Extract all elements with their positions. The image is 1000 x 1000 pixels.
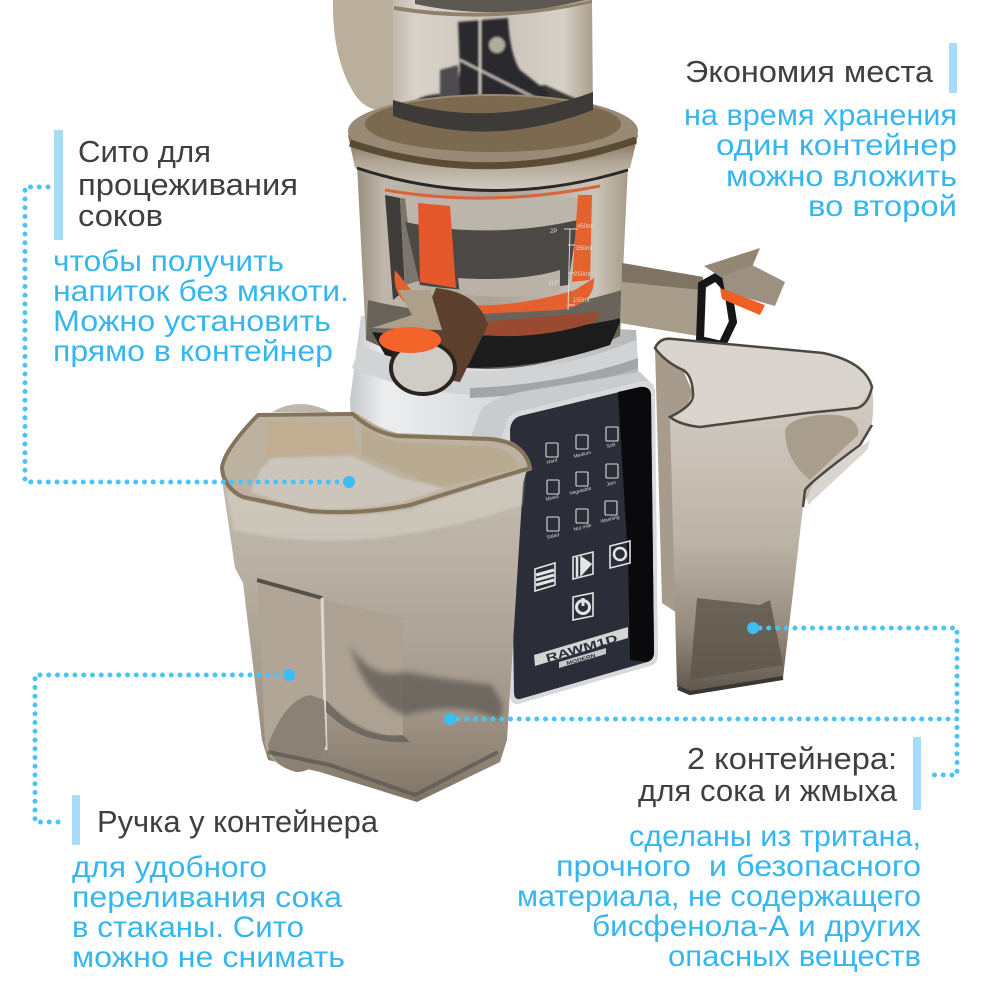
feed chute xyxy=(333,0,396,110)
mode labels xyxy=(545,442,620,541)
heading xyxy=(638,741,898,808)
cap flap xyxy=(372,290,442,330)
auger shaft xyxy=(452,18,548,135)
spout edge line xyxy=(803,425,872,507)
tube mouth xyxy=(391,342,455,394)
left dark wall xyxy=(385,195,405,300)
strainer xyxy=(385,195,580,300)
block: two containers xyxy=(517,737,921,973)
scale labels lower: 1LP xyxy=(548,281,559,287)
spout tube xyxy=(620,263,703,336)
mode icons xyxy=(546,427,618,531)
scale labels: 450ml xyxy=(577,224,593,230)
description: чтобы получить xyxy=(53,245,284,278)
rim fill xyxy=(220,412,532,515)
rim line xyxy=(655,339,872,427)
measuring scale xyxy=(564,224,593,310)
heading: Экономия места xyxy=(685,54,934,89)
heading: соков xyxy=(78,198,163,233)
bottom floor xyxy=(690,598,783,680)
description: для удобного xyxy=(72,851,267,884)
scale labels lower xyxy=(548,229,592,304)
lid band xyxy=(348,135,638,189)
icon salad xyxy=(547,517,559,531)
icon nut milk xyxy=(576,509,588,523)
heading: для сока и жмыха xyxy=(638,773,898,808)
marker xyxy=(343,476,355,488)
description: Можно установить xyxy=(53,305,331,338)
heading: Сито для xyxy=(78,134,211,169)
auger highlight xyxy=(460,60,535,98)
callout: sieve dotted line xyxy=(25,187,355,488)
handle body xyxy=(258,580,326,772)
scale labels lower: 350ml xyxy=(576,246,592,252)
inner back wall xyxy=(265,422,358,458)
callout: handle dotted line xyxy=(35,669,295,822)
marker xyxy=(283,669,295,681)
panel frame xyxy=(505,381,658,704)
orange arc under lid xyxy=(385,186,600,198)
panel black reflection xyxy=(618,387,654,662)
modern strip xyxy=(559,648,606,668)
lid top xyxy=(348,94,638,168)
juice container xyxy=(220,404,532,802)
recess lower curve xyxy=(326,700,410,742)
cup centre seam xyxy=(479,18,481,140)
upper cup xyxy=(393,0,593,131)
scale labels lower: 2P xyxy=(550,229,557,235)
left orange post xyxy=(418,203,456,288)
block: space saving xyxy=(684,43,957,223)
description: опасных веществ xyxy=(668,940,921,973)
logo text: RAWM1D xyxy=(545,633,619,665)
description: прямо в контейнер xyxy=(53,335,333,368)
control panel xyxy=(505,381,658,704)
handle reflection xyxy=(268,695,326,772)
lid xyxy=(348,92,638,198)
mode labels: Medium xyxy=(573,450,592,460)
light band under rim xyxy=(226,470,525,541)
icon jam xyxy=(606,464,618,478)
spout cap xyxy=(722,265,785,306)
juicer body xyxy=(333,0,785,445)
black clip xyxy=(700,277,733,345)
heading: процеживания xyxy=(78,167,298,202)
block: sieve xyxy=(53,130,349,368)
handle xyxy=(257,580,326,772)
block: handle xyxy=(72,795,379,974)
mode labels: Mixed xyxy=(545,494,560,503)
rim outline xyxy=(222,414,530,512)
container silhouette xyxy=(222,420,530,802)
heading: 2 контейнера: xyxy=(687,741,897,776)
mode labels: Washing xyxy=(600,514,620,525)
description: сделаны из тритана, xyxy=(629,820,921,853)
icon medium xyxy=(576,435,588,449)
accent bar xyxy=(72,795,80,845)
mode labels: Nut milk xyxy=(573,523,592,533)
mode labels: Jam xyxy=(606,480,617,488)
interior xyxy=(655,339,872,427)
mode labels: Hard xyxy=(546,457,558,466)
silver base xyxy=(350,316,640,445)
dark cylinder xyxy=(405,220,578,290)
right orange post xyxy=(572,195,592,282)
description: прочного и безопасного xyxy=(556,850,921,883)
lid inner ring xyxy=(365,96,621,152)
orange seal xyxy=(720,288,765,315)
dots xyxy=(35,675,285,822)
left auger fin xyxy=(440,65,462,130)
heading xyxy=(78,134,298,233)
description: в стаканы. Сито xyxy=(72,911,304,944)
marker juice xyxy=(444,713,456,725)
accent bar xyxy=(949,43,957,93)
menu button xyxy=(535,563,555,591)
description: один контейнер xyxy=(716,129,957,162)
spout bulge xyxy=(785,415,858,480)
cap flap xyxy=(704,248,760,278)
mesh strainer xyxy=(250,456,445,509)
accent bar xyxy=(54,130,63,240)
auger bottom shadow xyxy=(397,85,590,132)
dark reflection xyxy=(350,645,503,720)
description: можно вложить xyxy=(726,160,957,193)
handle edge xyxy=(322,598,326,750)
inner right wall xyxy=(362,425,518,488)
body shell xyxy=(357,165,628,362)
marker pulp xyxy=(747,622,759,634)
body xyxy=(670,387,873,693)
scale labels lower: 150ml xyxy=(573,298,589,304)
button icons xyxy=(535,541,630,620)
lid lower dark line xyxy=(357,168,628,191)
description: материала, не содержащего xyxy=(517,880,921,913)
RAWMID logo xyxy=(534,627,628,668)
power button xyxy=(573,593,593,620)
play button xyxy=(573,552,593,579)
description: можно не снимать xyxy=(72,941,345,974)
base line xyxy=(678,678,783,693)
mesh lower xyxy=(458,270,560,297)
spout tube xyxy=(400,288,488,382)
back wall xyxy=(655,348,693,615)
modern text: MODERN xyxy=(566,653,597,667)
mode labels: Soft xyxy=(606,442,617,450)
icon washing xyxy=(605,501,617,515)
description xyxy=(72,851,345,974)
callout: containers dotted line xyxy=(444,622,957,775)
scale labels lower: 250ml xyxy=(574,272,590,278)
recess xyxy=(325,600,403,736)
mesh upper xyxy=(405,198,580,230)
cycle button xyxy=(610,541,630,568)
mode labels: Vegetable xyxy=(569,486,592,497)
description: напиток без мякоти. xyxy=(53,275,349,308)
spout top band xyxy=(622,263,703,290)
dots xyxy=(25,187,345,482)
lid brown arc xyxy=(350,140,636,166)
panel glass xyxy=(510,387,654,699)
collar shadow xyxy=(470,358,638,398)
white underside xyxy=(805,440,870,505)
panel housing xyxy=(470,372,652,440)
description xyxy=(684,99,957,223)
description: во второй xyxy=(808,190,957,223)
pulp container xyxy=(655,339,873,693)
icon mixed xyxy=(547,480,559,494)
heading: Ручка у контейнера xyxy=(97,804,379,839)
description: на время хранения xyxy=(684,99,957,132)
description xyxy=(53,245,349,368)
logo strip xyxy=(534,627,628,666)
icon soft xyxy=(606,427,618,441)
scale line xyxy=(564,229,578,310)
grey left wall xyxy=(400,198,422,285)
cup bottom in lid xyxy=(393,92,593,132)
black base of body xyxy=(372,318,622,368)
icon hard xyxy=(546,443,558,457)
icon vegetable xyxy=(576,472,588,486)
description: бисфенола-А и других xyxy=(592,910,921,943)
orange frame xyxy=(395,195,600,336)
orange teeth xyxy=(482,312,600,336)
cup rim xyxy=(394,0,592,17)
description: переливания сока xyxy=(72,881,342,914)
orange ring xyxy=(395,270,594,316)
handle top shadow xyxy=(257,580,322,598)
left spout xyxy=(372,288,488,394)
auger hole xyxy=(489,37,505,53)
container knob xyxy=(272,404,330,412)
description xyxy=(517,820,921,973)
body interior dark bottom xyxy=(366,290,622,369)
base collar xyxy=(352,340,638,395)
mode labels: Salad xyxy=(546,532,560,541)
cup interior dark xyxy=(415,0,585,12)
accent bar xyxy=(913,737,921,810)
auger xyxy=(397,18,590,140)
dots xyxy=(458,628,957,775)
right spout xyxy=(620,248,785,345)
orange seal xyxy=(379,327,441,353)
container base line xyxy=(268,752,498,795)
